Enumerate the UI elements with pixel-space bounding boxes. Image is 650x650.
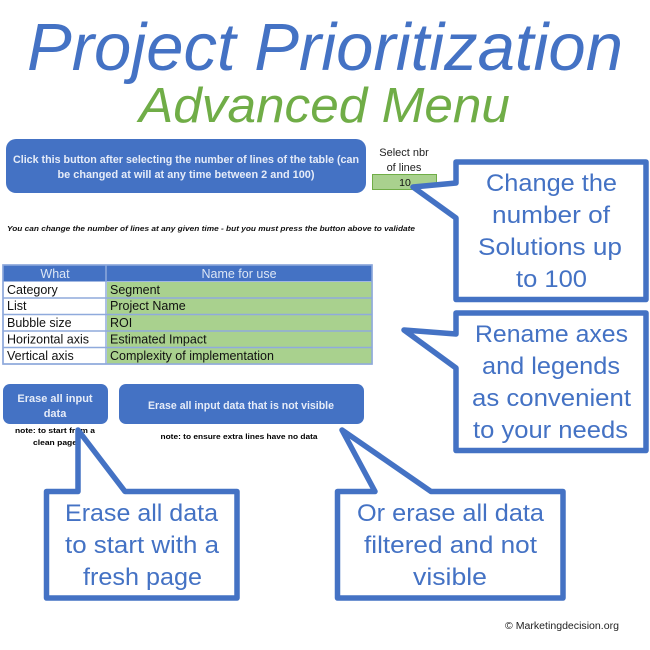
callout: erase all data (46, 430, 237, 598)
table: axis names: Name for use (201, 267, 277, 281)
selector: number of lines: Select nbr (379, 147, 429, 159)
button: erase all input data: Erase all input (17, 393, 93, 405)
note: clean page: note: to start from a (15, 426, 96, 435)
button: validate number of lines: be changed at will at any time between 2 and 100) (58, 169, 315, 181)
title (27, 10, 623, 133)
callout: rename axes: and legends (482, 353, 620, 380)
callout: rename axes: Rename axes (475, 321, 628, 348)
callout: erase filtered data: Or erase all data (357, 500, 544, 527)
callout: erase filtered data: visible (413, 564, 487, 591)
selector: number of lines: 10 (399, 177, 411, 189)
callout: change number of solutions: number of (492, 202, 610, 229)
callout: change number of solutions: Change the (486, 170, 617, 197)
table: axis names: Horizontal axis (7, 332, 89, 346)
table: axis names (3, 265, 372, 364)
callout: rename axes: to your needs (473, 417, 628, 444)
note: validate reminder: You can change the number of lines at any given time - but you must press the button above to validate (7, 224, 415, 233)
copyright: © Marketingdecision.org (505, 621, 619, 632)
table: axis names: Complexity of implementation (110, 349, 274, 363)
callout: change number of solutions: Solutions up (478, 234, 622, 261)
note: clean page (15, 426, 96, 447)
table: axis names: Category (7, 283, 58, 297)
table: axis names: Vertical axis (7, 349, 74, 363)
selector: number of lines: of lines (387, 162, 422, 174)
callout: erase all data: to start with a (65, 532, 219, 559)
note: clean page: clean page (33, 438, 77, 447)
table: axis names: Project Name (110, 299, 186, 313)
callout: change number of solutions: to 100 (516, 266, 587, 293)
button: erase data not visible (119, 384, 364, 424)
selector: number of lines (372, 147, 436, 190)
table: axis names: List (7, 299, 27, 313)
callout: erase filtered data (338, 430, 563, 598)
title: Project Prioritization (27, 10, 623, 85)
title: Advanced Menu (136, 79, 510, 133)
button: validate number of lines (6, 139, 366, 193)
button: erase data not visible: Erase all input data that is not visible (148, 400, 334, 412)
note: extra lines: note: to ensure extra lines have no data (160, 432, 318, 441)
button: validate number of lines: Click this button after selecting the number of lines of the table (can (13, 154, 359, 166)
table: axis names: Bubble size (7, 316, 72, 330)
button: erase all input data (3, 384, 108, 424)
callout: rename axes (404, 313, 646, 450)
callout: erase all data: Erase all data (65, 500, 218, 527)
table: axis names: Estimated Impact (110, 332, 207, 346)
callout: erase all data: fresh page (83, 564, 202, 591)
callout: change number of solutions (413, 162, 646, 300)
callout: rename axes: as convenient (472, 385, 631, 412)
callout: erase filtered data: filtered and not (364, 532, 537, 559)
table: axis names: ROI (110, 316, 132, 330)
button: erase all input data: data (44, 408, 67, 420)
table: axis names: What (40, 267, 70, 281)
table: axis names: Segment (110, 283, 161, 297)
